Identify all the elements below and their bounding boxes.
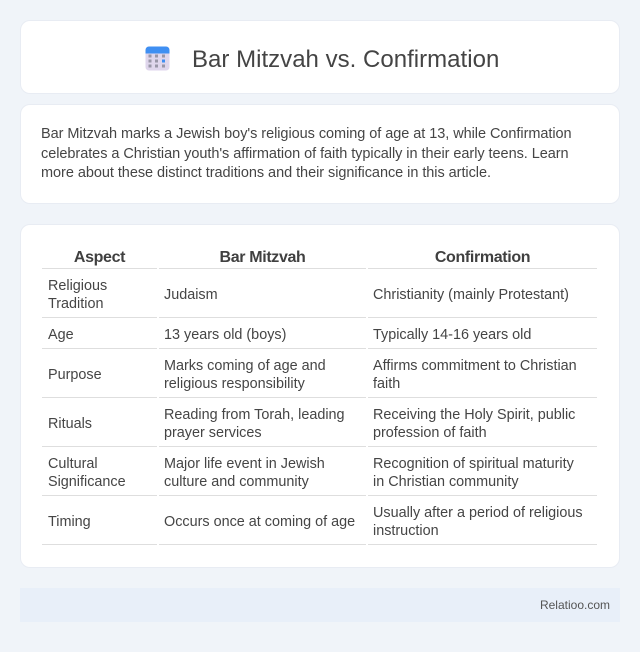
title: Bar Mitzvah vs. Confirmation bbox=[192, 46, 499, 73]
footer credit: Relatioo.com bbox=[540, 598, 610, 612]
row: Purpose: faith bbox=[373, 376, 400, 392]
row: Religious Tradition: Religious bbox=[48, 278, 107, 294]
row: Rituals bbox=[48, 407, 575, 441]
row: Purpose: religious responsibility bbox=[164, 376, 305, 392]
row: Cultural Significance: Major life event in Jewish bbox=[164, 456, 325, 472]
row: Timing bbox=[48, 505, 583, 539]
row: Purpose: Affirms commitment to Christian bbox=[373, 358, 577, 374]
row: Cultural Significance: Significance bbox=[48, 474, 126, 490]
panel: introduction bbox=[20, 104, 620, 204]
row: Rituals: prayer services bbox=[164, 425, 262, 441]
row: Age: Typically 14-16 years old bbox=[373, 327, 531, 343]
column heading: Confirmation: Confirmation bbox=[435, 249, 530, 266]
row: Age bbox=[48, 327, 531, 343]
row: Age: Age bbox=[48, 327, 74, 343]
row: Rituals: Receiving the Holy Spirit, public bbox=[373, 407, 575, 423]
text block: introduction: Bar Mitzvah marks a Jewish boy's religious coming of age at 13, while Confirmation bbox=[41, 126, 572, 142]
row: Rituals: profession of faith bbox=[373, 425, 487, 441]
footer bar bbox=[20, 588, 620, 622]
row: Cultural Significance bbox=[48, 456, 574, 490]
column heading: Aspect: Aspect bbox=[74, 249, 125, 266]
panel: comparison table bbox=[20, 224, 620, 568]
row: Purpose: Marks coming of age and bbox=[164, 358, 326, 374]
row: Cultural Significance: Cultural bbox=[48, 456, 98, 472]
row: Cultural Significance: in Christian community bbox=[373, 474, 519, 490]
row: Age: 13 years old (boys) bbox=[164, 327, 286, 343]
column heading: Bar Mitzvah: Bar Mitzvah bbox=[220, 249, 305, 266]
row: Cultural Significance: Recognition of spiritual maturity bbox=[373, 456, 574, 472]
icon: calendar bbox=[146, 46, 170, 70]
row: Purpose bbox=[48, 358, 577, 392]
row: Rituals: Reading from Torah, leading bbox=[164, 407, 345, 423]
row: Religious Tradition: Judaism bbox=[164, 287, 218, 303]
row: Religious Tradition bbox=[48, 278, 569, 312]
text block: introduction bbox=[41, 126, 572, 181]
row: Cultural Significance: culture and community bbox=[164, 474, 309, 490]
row: Religious Tradition: Tradition bbox=[48, 296, 103, 312]
row: Purpose: Purpose bbox=[48, 367, 102, 383]
text block: introduction: celebrates a Christian youth's affirmation of faith typically in their early teens. Learn bbox=[41, 146, 569, 162]
row: Timing: Timing bbox=[48, 514, 91, 530]
panel: title card bbox=[20, 20, 620, 94]
row: Timing: Occurs once at coming of age bbox=[164, 514, 355, 530]
row: Timing: Usually after a period of religious bbox=[373, 505, 583, 521]
row: Religious Tradition: Christianity (mainly Protestant) bbox=[373, 287, 569, 303]
row: Rituals: Rituals bbox=[48, 416, 92, 432]
row: Timing: instruction bbox=[373, 523, 439, 539]
text block: introduction: more about these distinct traditions and their significance in this article. bbox=[41, 165, 491, 181]
